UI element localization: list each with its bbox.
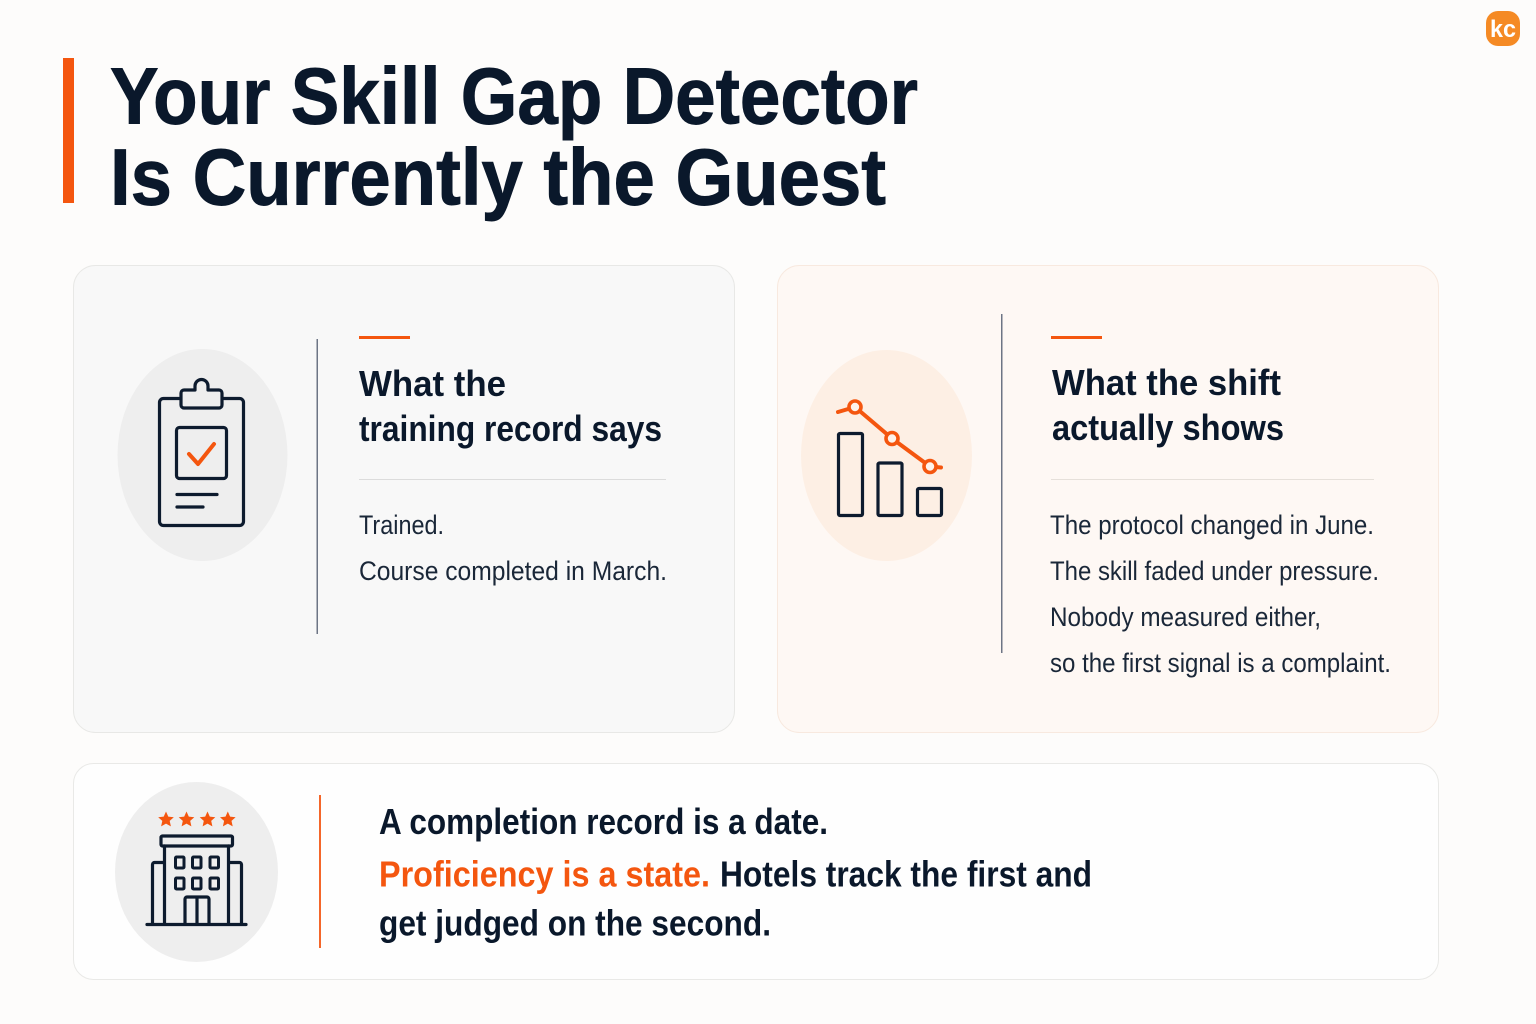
- statement text: get judged on the second.: [379, 902, 771, 944]
- statement text: Proficiency is a state.: [379, 854, 710, 894]
- body text: shift: Nobody measured either,: [1050, 602, 1321, 632]
- heading: what the training record says: training record says: [359, 408, 662, 449]
- heading: what the training record says: What the: [359, 363, 506, 404]
- body text: training record: [359, 510, 667, 586]
- title: [110, 52, 918, 222]
- logo: kc badge: [1486, 11, 1520, 46]
- body text: shift: so the first signal is a complaint.: [1050, 648, 1391, 678]
- icon: clipboard with check: [118, 349, 288, 561]
- body text: shift: The skill faded under pressure.: [1050, 556, 1379, 586]
- heading: what the training record says: [359, 363, 662, 449]
- accent dash: [1051, 336, 1102, 339]
- body text: shift: [1050, 510, 1391, 678]
- panel divider: orange: [319, 795, 321, 948]
- title: Is Currently the Guest: [110, 132, 886, 222]
- title accent bar: [63, 58, 74, 203]
- statement text: A completion record is a date.: [379, 801, 828, 842]
- icon: hotel with stars: [115, 782, 278, 962]
- panel: conclusion: [74, 764, 1438, 980]
- body text: shift: The protocol changed in June.: [1050, 510, 1374, 540]
- panel: training record: [74, 266, 734, 732]
- heading: what the shift actually shows: actually shows: [1052, 407, 1284, 448]
- heading: what the shift actually shows: What the shift: [1052, 362, 1281, 403]
- title: Your Skill Gap Detector: [110, 52, 918, 140]
- logo: kc badge: kc: [1490, 16, 1516, 43]
- statement text: Hotels track the first and: [720, 854, 1092, 894]
- body text: training record: Course completed in March.: [359, 556, 667, 586]
- icon: declining bar chart: [801, 350, 972, 561]
- panel divider: [316, 339, 318, 634]
- panel: shift: [778, 266, 1438, 732]
- accent dash: [359, 336, 410, 339]
- statement text: [379, 801, 1092, 944]
- heading: what the shift actually shows: [1052, 362, 1284, 448]
- panel divider: [1001, 314, 1002, 653]
- body text: training record: Trained.: [359, 510, 444, 540]
